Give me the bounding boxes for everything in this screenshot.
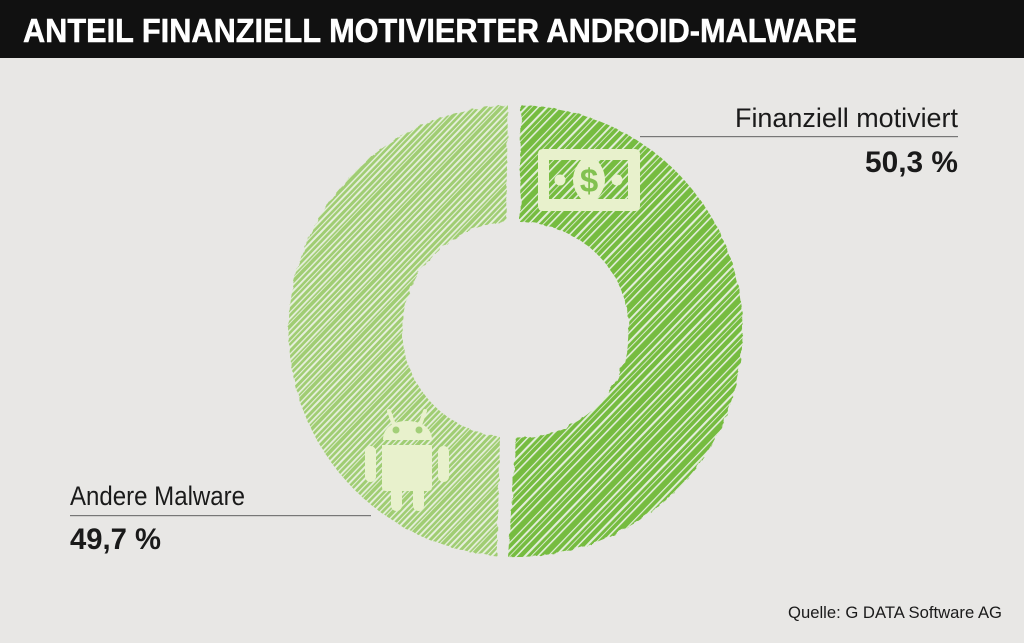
donut chart xyxy=(275,95,755,570)
label: Andere Malware: Andere Malware xyxy=(70,481,245,511)
icon: banknote: $ xyxy=(580,162,598,199)
icon: android robot xyxy=(365,411,449,511)
icon: banknote xyxy=(538,149,640,211)
label: Finanziell motiviert: 50,3 % xyxy=(865,146,958,179)
source note: Quelle: G DATA Software AG xyxy=(788,603,1002,622)
label: Finanziell motiviert xyxy=(640,103,958,179)
segment: Andere Malware xyxy=(288,105,508,556)
label: Finanziell motiviert: Finanziell motiviert xyxy=(735,103,958,133)
label: Andere Malware: 49,7 % xyxy=(70,523,161,556)
segment: Finanziell motiviert xyxy=(508,105,744,558)
title bar: ANTEIL FINANZIELL MOTIVIERTER ANDROID-MALWARE xyxy=(23,12,857,49)
label: Andere Malware xyxy=(70,481,371,556)
title bar xyxy=(0,0,1024,58)
